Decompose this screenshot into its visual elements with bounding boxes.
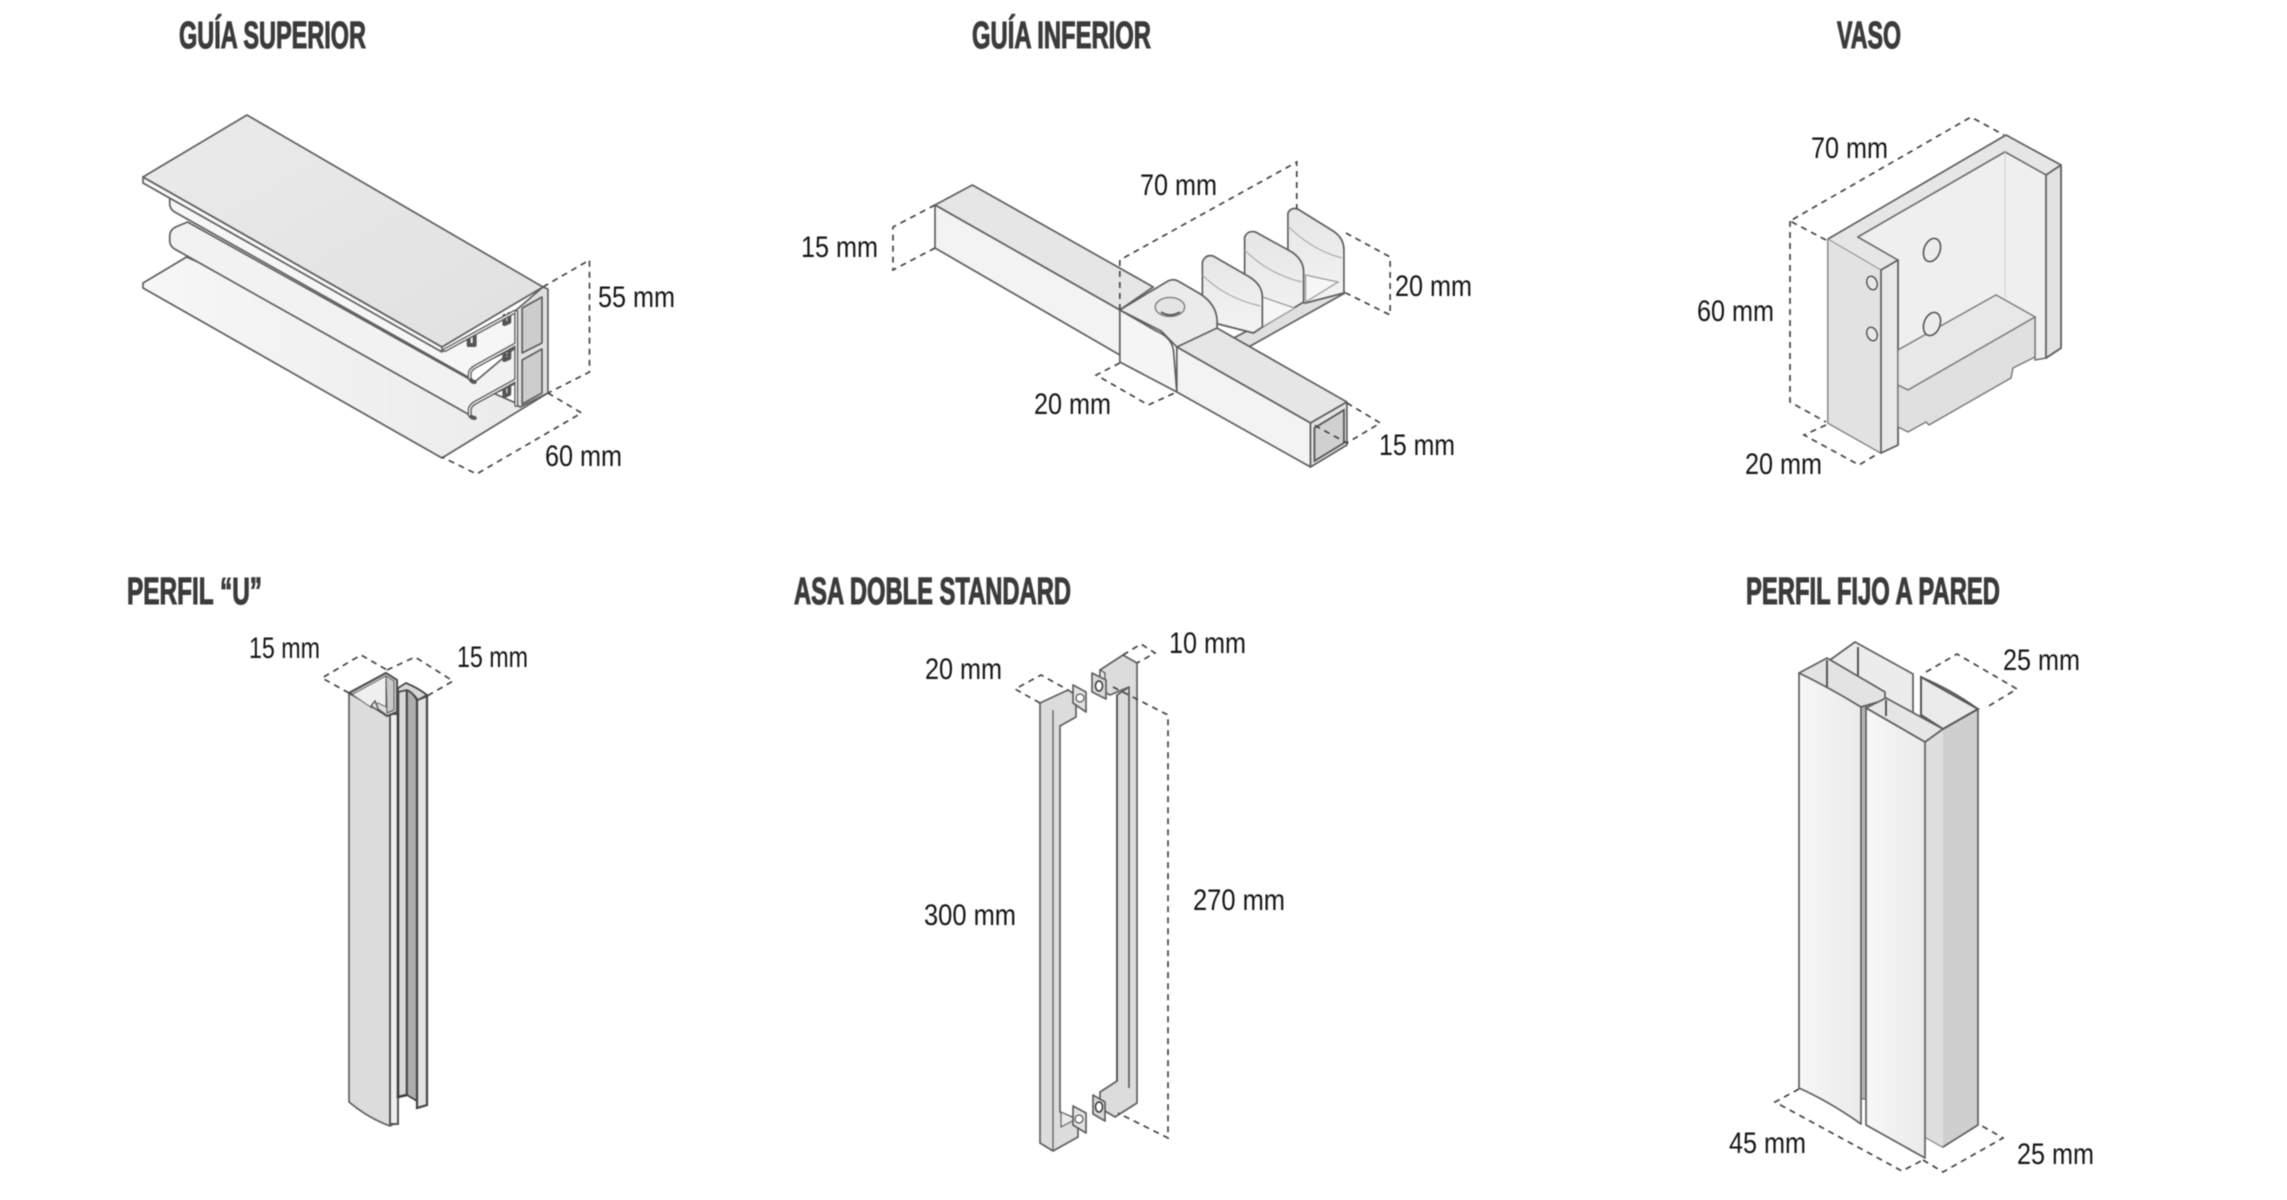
label: 70 mm: 70 mm	[1140, 169, 1217, 202]
dimension: 15 mm left	[322, 655, 387, 693]
title: vaso: VASO	[1837, 15, 1901, 57]
title: asa doble standard: ASA DOBLE STANDARD	[794, 571, 1071, 613]
panel: perfil U	[127, 571, 528, 1126]
dimension: 270 mm	[1113, 687, 1168, 1138]
drawing: perfil fijo a pared	[1799, 642, 1978, 1158]
dimension: 15 mm end	[1311, 403, 1380, 443]
dimension: 25 mm top	[1926, 654, 2017, 707]
panel: asa doble standard	[794, 571, 1285, 1151]
label: 300 mm: 300 mm	[924, 899, 1016, 932]
label: 270 mm: 270 mm	[1193, 884, 1285, 917]
label: 55 mm: 55 mm	[598, 281, 675, 314]
label: 20 mm: 20 mm	[925, 653, 1002, 686]
dimension: 20 mm bottom	[1096, 363, 1177, 405]
dimension: 20 mm	[1015, 675, 1068, 703]
dimension: 60 mm width	[442, 393, 582, 474]
drawing: left handle	[1040, 685, 1086, 1151]
dimension: 70 mm	[1120, 162, 1297, 310]
panel: vaso	[1697, 15, 2061, 481]
label: 25 mm bottom: 25 mm	[2017, 1138, 2094, 1171]
title: guía superior: GUÍA SUPERIOR	[179, 13, 366, 57]
drawing: vaso bracket	[1828, 135, 2061, 453]
title: guía inferior: GUÍA INFERIOR	[972, 13, 1151, 57]
dimension: 55 mm height	[543, 260, 589, 393]
label: 15 mm right: 15 mm	[457, 641, 528, 674]
drawing: perfil U	[349, 673, 427, 1126]
panel: guía inferior	[801, 13, 1472, 467]
drawing: guía superior profile	[143, 115, 548, 458]
label: 20 mm bottom: 20 mm	[1034, 388, 1111, 421]
label: 20 mm: 20 mm	[1745, 448, 1822, 481]
title: perfil U: PERFIL “U”	[127, 571, 262, 613]
dimension: 15 mm right	[387, 657, 453, 696]
label: 45 mm: 45 mm	[1729, 1127, 1806, 1160]
title: perfil fijo a pared: PERFIL FIJO A PARED	[1746, 571, 2000, 613]
panel: guía superior	[143, 13, 675, 474]
dimension: 60 mm	[1790, 221, 1826, 422]
label: 15 mm left: 15 mm	[249, 632, 320, 665]
dimension: 20 mm right	[1346, 233, 1390, 315]
dimension: 10 mm	[1123, 644, 1155, 663]
drawing: right handle	[1092, 655, 1137, 1121]
label: 60 mm: 60 mm	[545, 440, 622, 473]
label: 15 mm right: 15 mm	[1379, 429, 1455, 462]
label: 15 mm left: 15 mm	[801, 231, 878, 264]
dimension: 25 mm bottom	[1923, 1126, 2003, 1172]
label: 25 mm top: 25 mm	[2003, 644, 2080, 677]
label: 20 mm right: 20 mm	[1395, 270, 1472, 303]
drawing: guía inferior assembly	[935, 185, 1347, 467]
panel: perfil fijo a pared	[1729, 571, 2094, 1172]
label: 10 mm: 10 mm	[1169, 627, 1246, 660]
dimension: 45 mm	[1775, 1089, 1923, 1171]
dimension: 70 mm	[1790, 117, 2004, 240]
dimension: 20 mm	[1804, 425, 1879, 465]
label: 60 mm: 60 mm	[1697, 295, 1774, 328]
dimension: 15 mm left	[893, 205, 935, 270]
label: 70 mm: 70 mm	[1811, 132, 1888, 165]
